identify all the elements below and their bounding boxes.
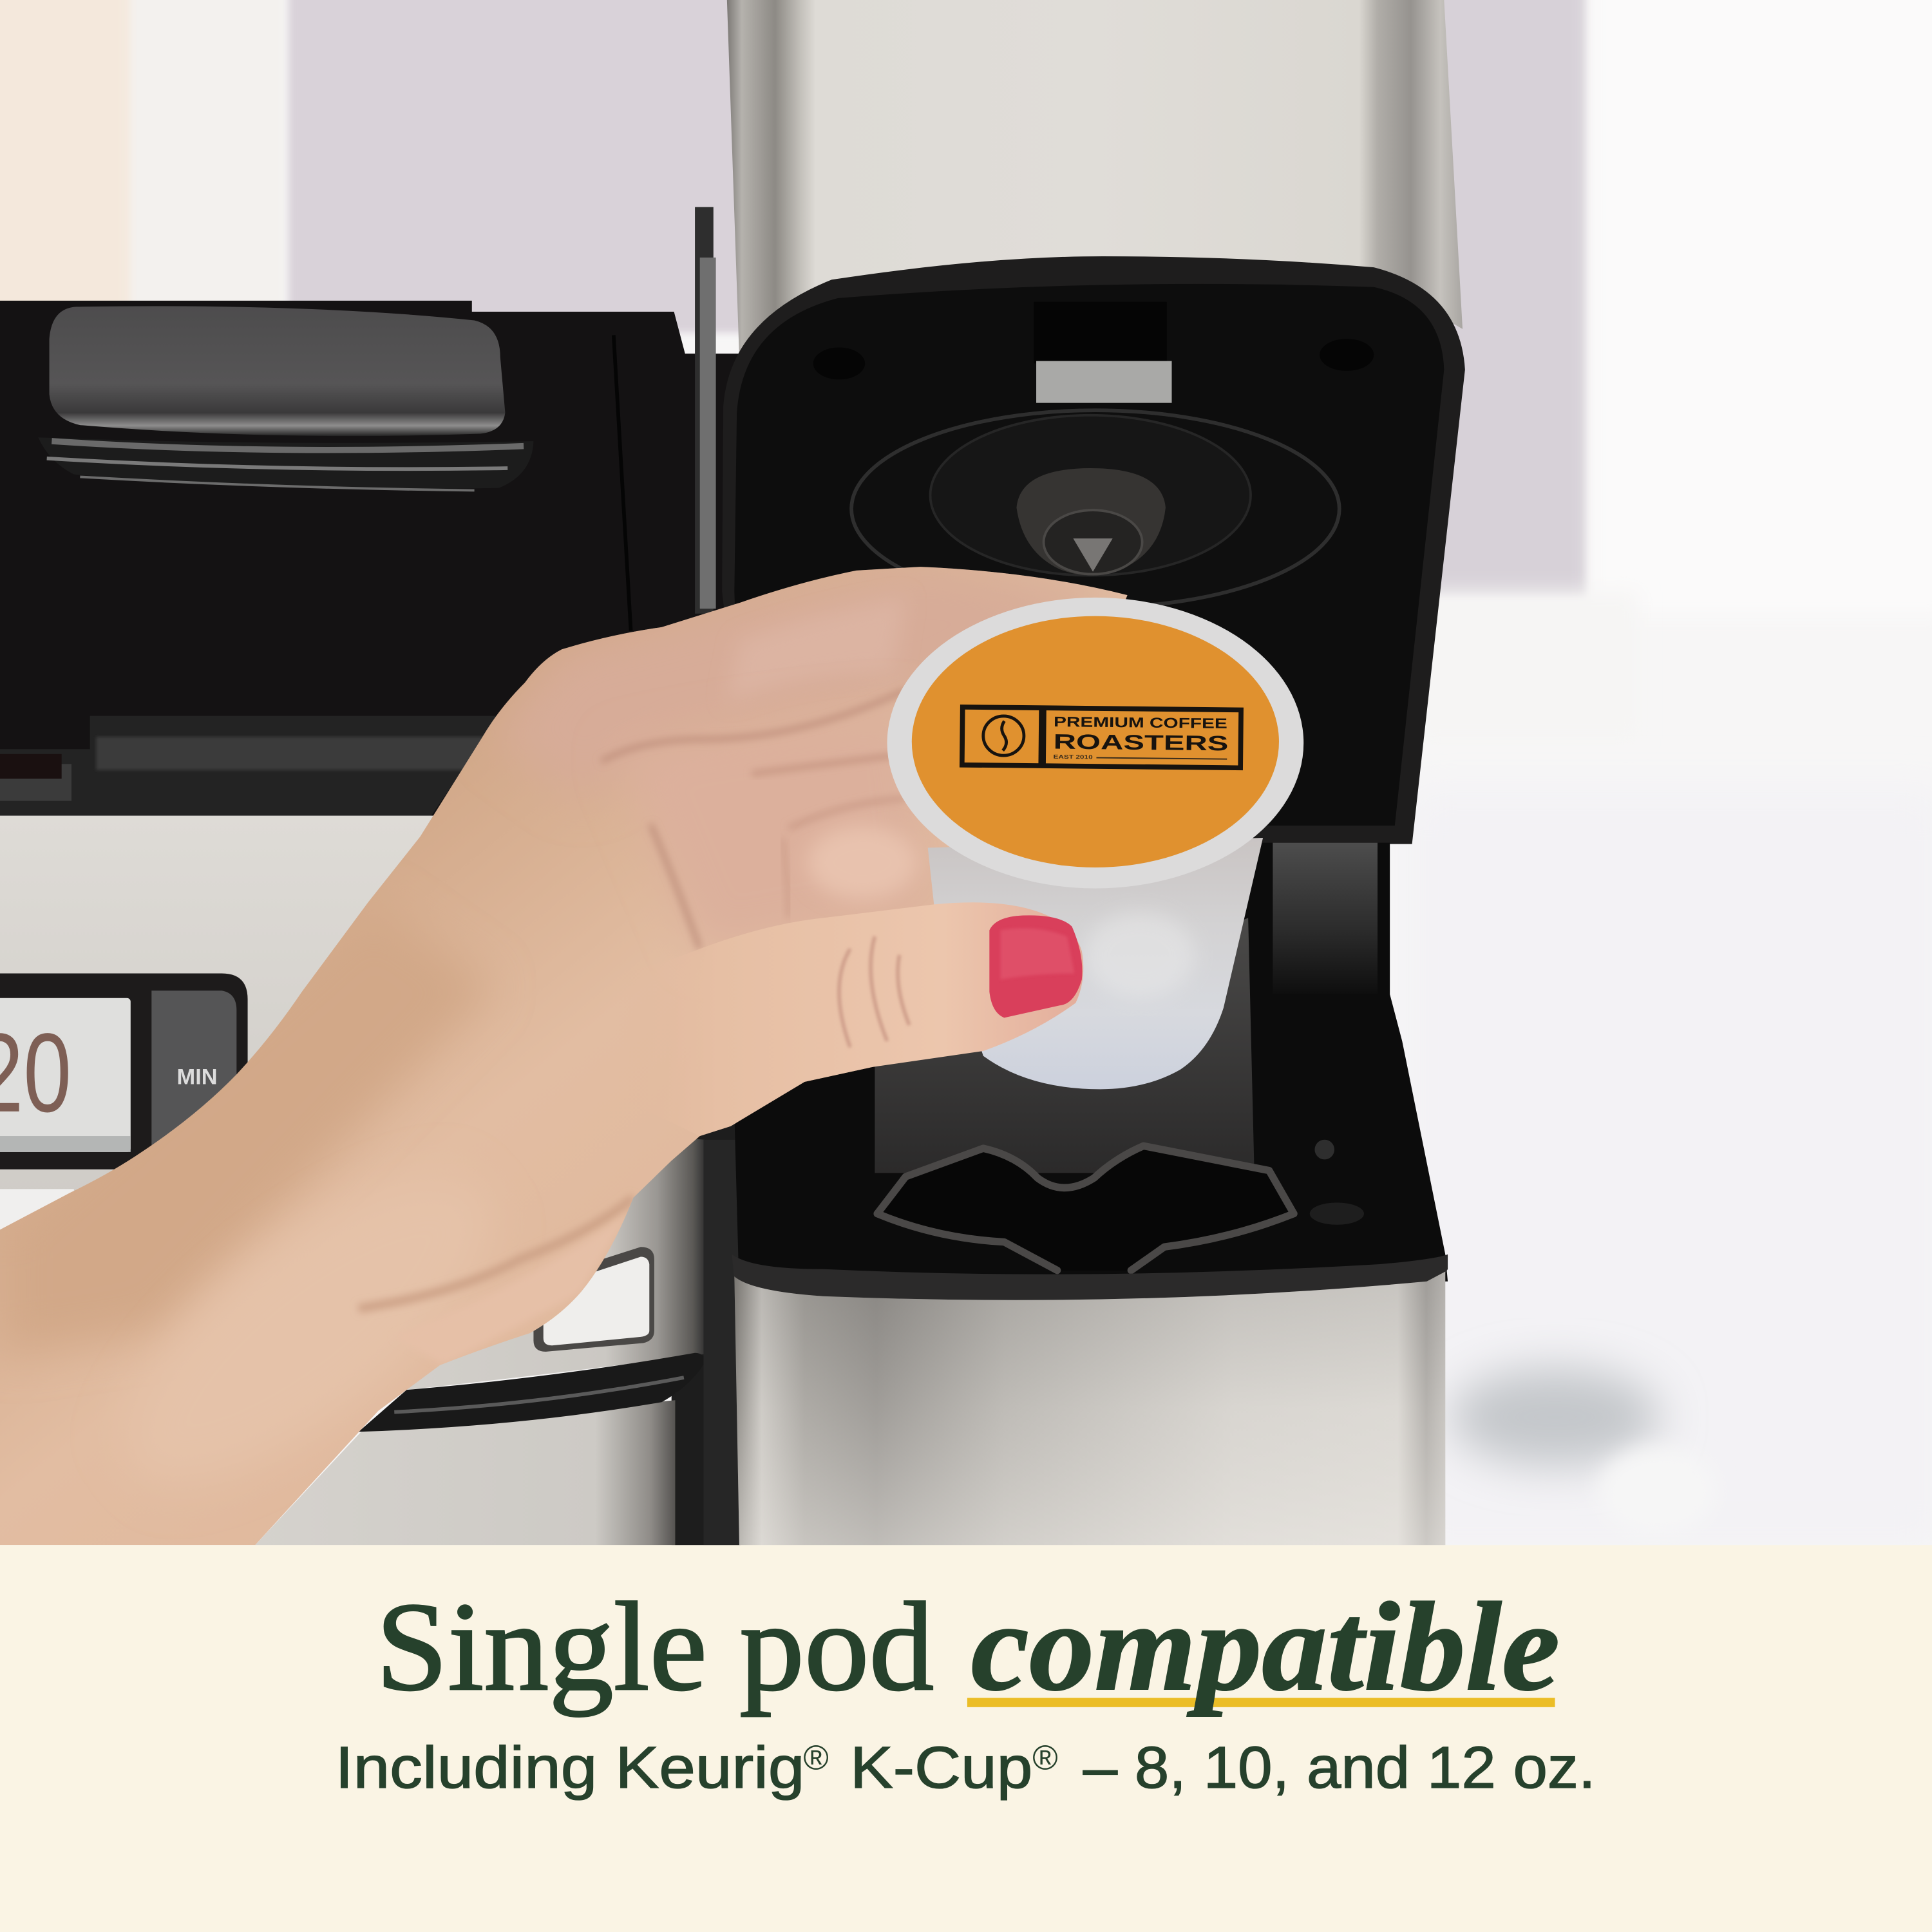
orange seal [912,616,1279,867]
min button [151,990,236,1146]
subheading: ® [803,1739,829,1777]
pod cup body [928,838,1263,1089]
subheading: K-Cup [850,1735,1032,1801]
arm highlight [163,1213,455,1452]
coffee pod lid [887,598,1303,888]
lower cavity [727,843,1448,1294]
caption banner [0,1545,1932,1932]
lid hinge ledge [0,716,500,816]
knuckle and finger tones [488,567,1112,762]
side silver strip [695,207,714,614]
heading: compatible [971,1576,1560,1717]
display screen [0,998,131,1152]
cup frosted highlight [1084,912,1195,998]
wrist crease [359,1198,633,1309]
stainless control panel [0,816,468,1198]
MIN label: MIN [177,1065,218,1090]
white button [533,1247,654,1352]
roasters logo: PREMIUM COFFEE [1054,714,1227,732]
inner side panel [1273,843,1378,994]
pod holder [877,1146,1294,1271]
subheading: – 8, 10, and 12 oz. [1083,1735,1596,1801]
roasters logo: EAST 2010 [1053,753,1093,760]
mounting holes [813,348,865,379]
thumb knuckle wrinkles [839,936,909,1047]
needle ring [851,410,1340,607]
finger creases [601,690,905,761]
base black lip [732,1255,1448,1301]
heading [376,1576,1560,1717]
heading: Single pod [376,1576,934,1717]
dark column behind carafe [672,1084,741,1545]
black side column [675,1392,739,1545]
needle hub [1016,468,1166,575]
water lid window [50,306,505,436]
thumb nail [989,915,1082,1018]
panel strip below display [0,1189,74,1232]
base stainless [734,1271,1445,1545]
open lid black rim [722,256,1465,844]
carafe stainless band [308,1109,705,1390]
black seam [359,1353,705,1432]
subheading [335,1735,1596,1801]
under-wrist tone [440,1229,612,1356]
subheading: ® [1032,1739,1058,1777]
thumb [591,902,1083,1136]
roasters logo: ROASTERS [1054,730,1229,755]
latch slot [1034,302,1167,363]
palm shade [693,737,918,939]
lid ridges [38,437,533,490]
subheading: Including Keurig [335,1735,804,1801]
silver latch [1036,361,1172,403]
yellow underline [967,1698,1555,1707]
top stainless [727,0,1463,357]
coffee maker: left carafe section [0,301,741,1545]
upper arm tone [0,900,493,1356]
roasters logo [962,707,1241,768]
lit palm pad [807,826,918,900]
back panel [875,918,1255,1173]
coffee maker: pod tower [695,0,1465,1545]
display bezel [0,973,248,1170]
hand: arm and palm [0,542,1171,1553]
black top housing [0,301,739,862]
lower carafe stainless [255,1399,680,1545]
foil rim [887,598,1303,888]
